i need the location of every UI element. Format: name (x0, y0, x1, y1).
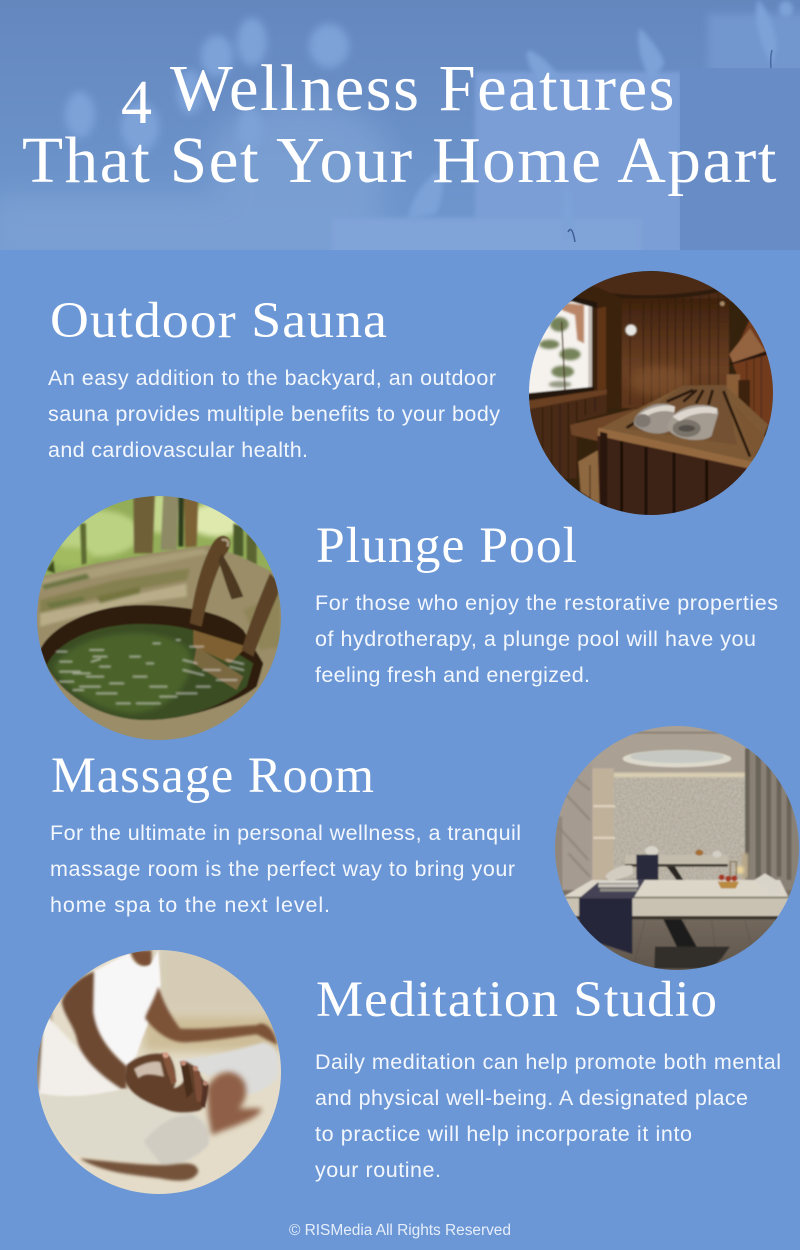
title: That Set Your Home Apart (22, 124, 778, 197)
text: massage room description (50, 821, 521, 917)
text: outdoor sauna description (48, 366, 500, 462)
photo: sauna interior (529, 271, 773, 515)
panel: outdoor sauna (48, 265, 780, 520)
text: massage room description: For the ultimate in personal wellness, a tranquil (50, 821, 521, 845)
text: plunge pool description: For those who enjoy the restorative properties (315, 591, 778, 615)
text: meditation studio description: your routine. (315, 1158, 441, 1182)
heading: massage room: Massage Room (51, 748, 375, 804)
text: plunge pool description (315, 591, 778, 687)
title (22, 52, 778, 197)
heading: outdoor sauna: Outdoor Sauna (50, 293, 388, 349)
text: massage room description: massage room is the perfect way to bring your (50, 857, 515, 881)
text: plunge pool description: feeling fresh and energized. (315, 663, 590, 687)
panel: massage room (50, 720, 800, 975)
photo: wooden plunge pool (37, 496, 281, 740)
text: meditation studio description (315, 1050, 781, 1182)
text: meditation studio description: to practice will help incorporate it into (315, 1122, 692, 1146)
text: massage room description: home spa to the next level. (50, 893, 330, 917)
photo: massage room (545, 720, 800, 975)
title: Wellness Features (170, 52, 676, 125)
text: outdoor sauna description: and cardiovascular health. (48, 438, 308, 462)
photo: person meditating (37, 950, 281, 1194)
text: meditation studio description: and physical well-being. A designated place (315, 1086, 748, 1110)
heading: plunge pool: Plunge Pool (316, 518, 578, 574)
footer copyright: © RISMedia All Rights Reserved (289, 1222, 511, 1239)
text: plunge pool description: of hydrotherapy, a plunge pool will have you (315, 627, 756, 651)
text: outdoor sauna description: sauna provides multiple benefits to your body (48, 402, 500, 426)
heading: meditation studio: Meditation Studio (316, 972, 718, 1028)
header banner with candles (0, 0, 800, 265)
text: meditation studio description: Daily meditation can help promote both mental (315, 1050, 781, 1074)
panel: meditation studio (30, 945, 781, 1200)
title: 4 (121, 69, 152, 137)
panel: plunge pool (30, 490, 778, 745)
text: outdoor sauna description: An easy addition to the backyard, an outdoor (48, 366, 496, 390)
